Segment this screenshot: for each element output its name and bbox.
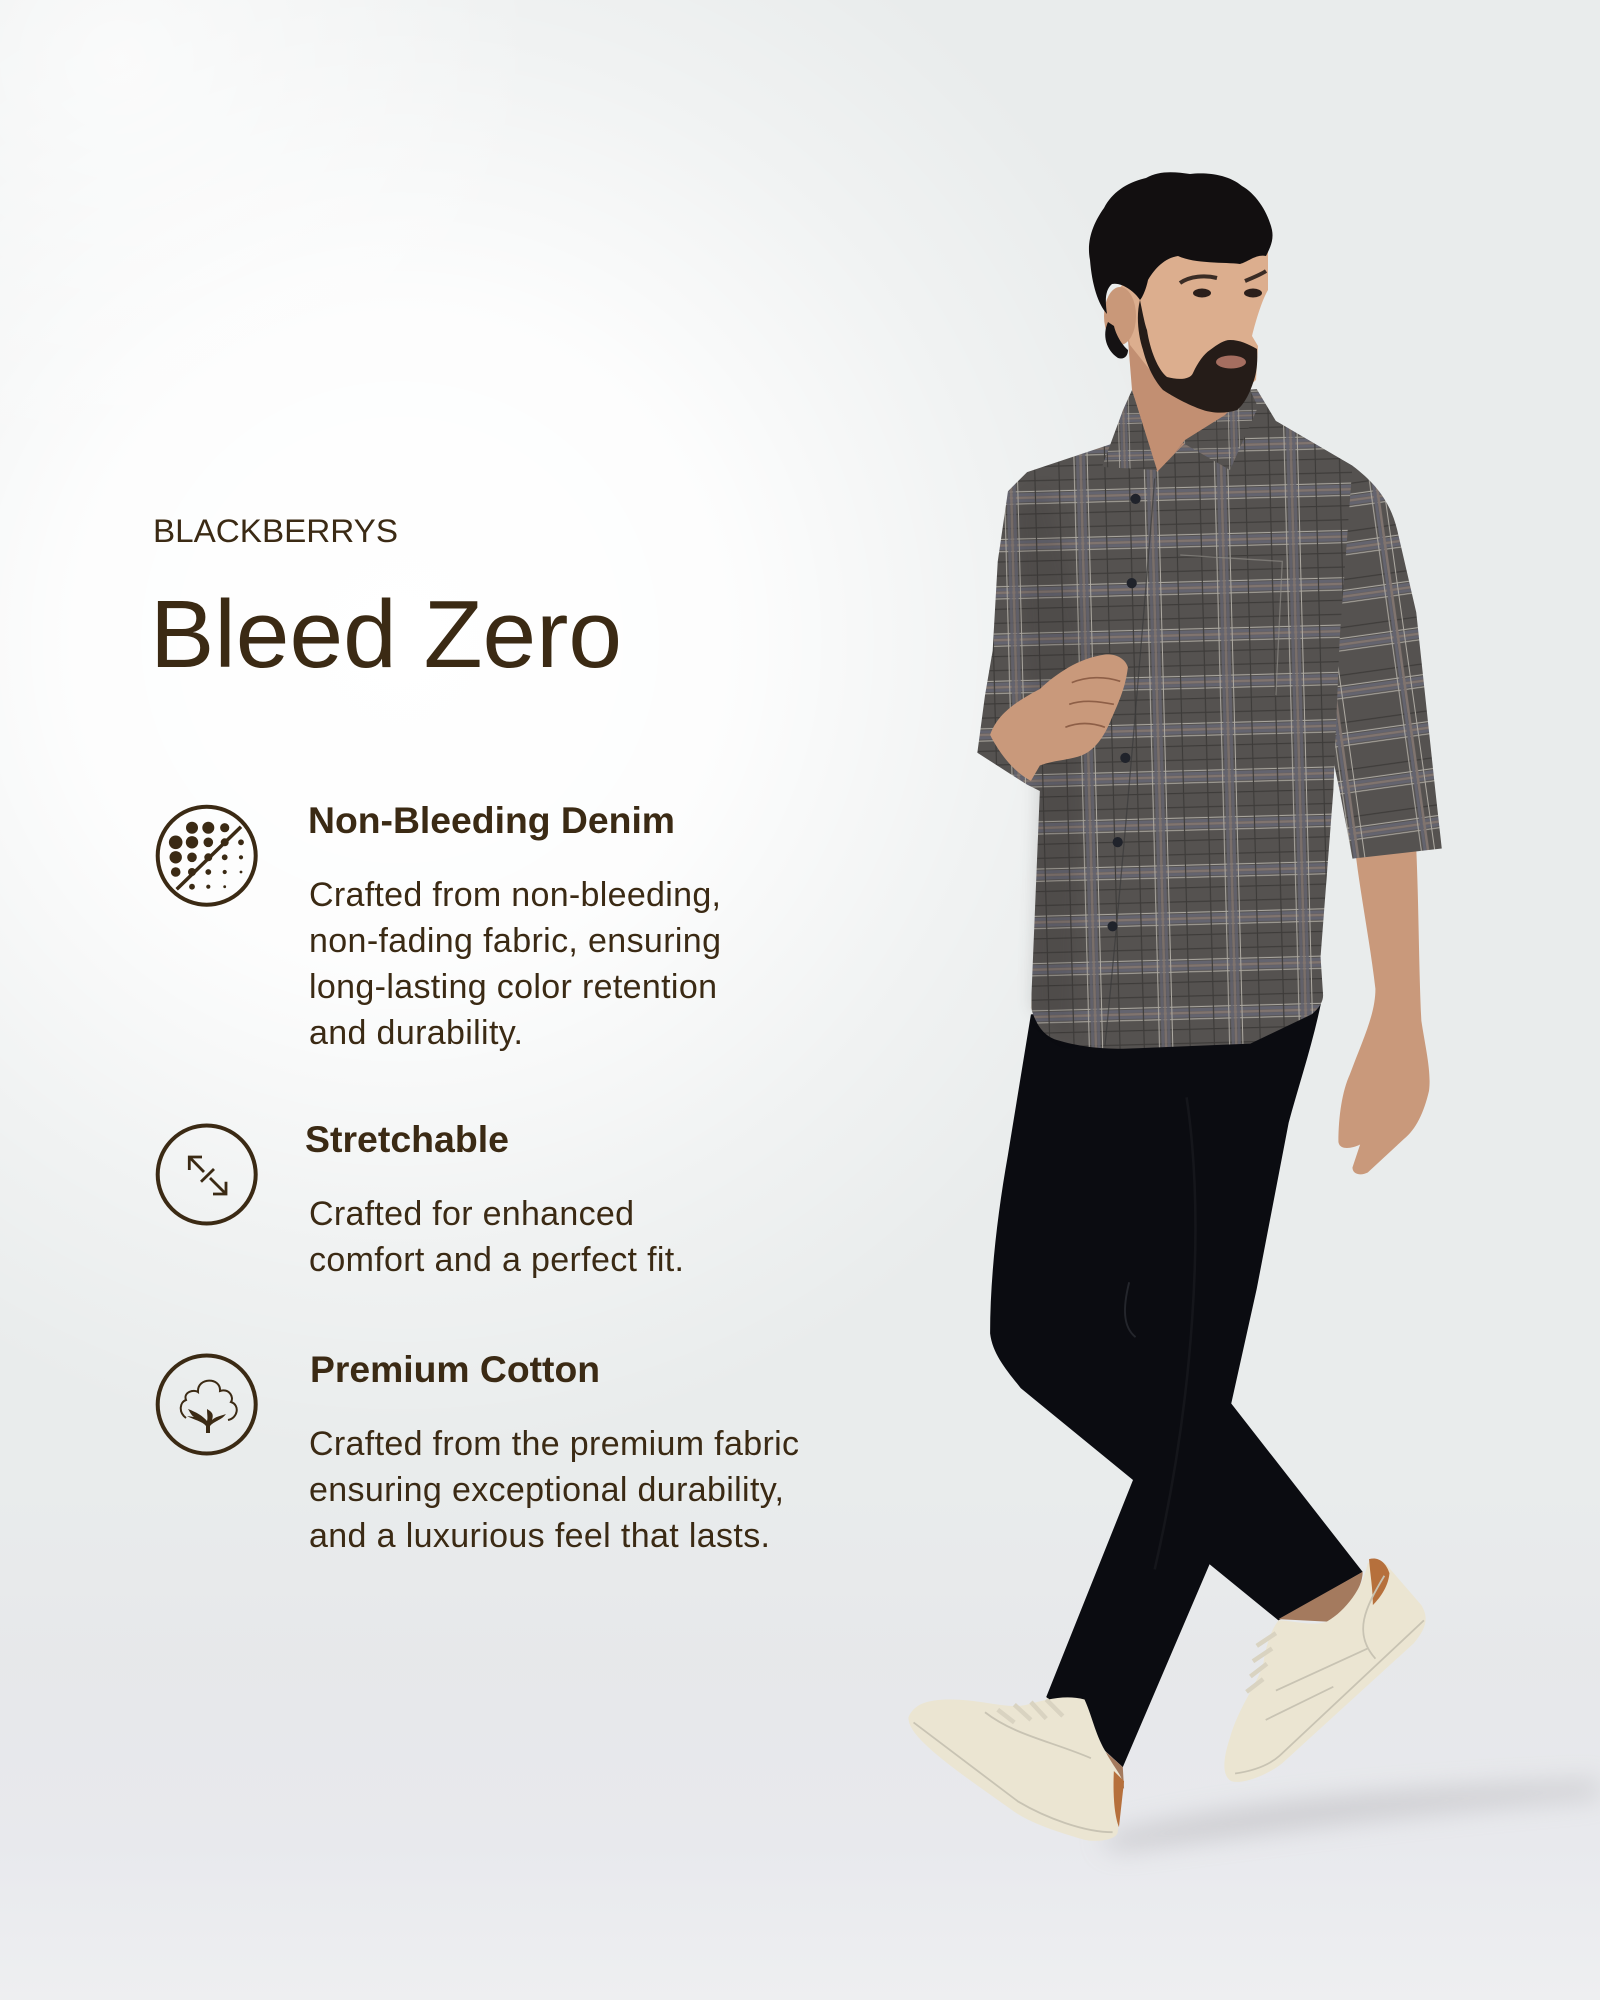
description: long-lasting color retention	[309, 968, 717, 1006]
description	[309, 876, 721, 1052]
description: Crafted from non-bleeding,	[309, 876, 721, 914]
description: and durability.	[309, 1014, 523, 1052]
ankle skin	[1087, 1572, 1363, 1789]
right sleeve	[1276, 421, 1442, 859]
icon: stretch arrows	[158, 1126, 256, 1224]
brand name: BLACKBERRYS	[153, 513, 398, 549]
description: and a luxurious feel that lasts.	[309, 1517, 770, 1555]
left hand	[990, 654, 1128, 781]
right shoe	[1224, 1559, 1426, 1782]
title: Bleed Zero	[150, 581, 622, 688]
ear	[1104, 287, 1136, 345]
lips	[1216, 356, 1246, 368]
face	[1118, 240, 1268, 410]
description	[309, 1195, 684, 1279]
right forearm	[1338, 848, 1430, 1174]
description: Crafted from the premium fabric	[309, 1425, 799, 1463]
neck	[1128, 330, 1245, 472]
shirt body	[977, 389, 1352, 1049]
beard	[1138, 300, 1257, 413]
heading: Premium Cotton	[310, 1349, 600, 1390]
icon: halftone dots	[158, 807, 256, 905]
floor shadow	[1100, 1782, 1600, 1850]
model figure	[908, 172, 1442, 1841]
eyes and brows	[1180, 271, 1266, 298]
heading: Stretchable	[305, 1119, 509, 1160]
description: comfort and a perfect fit.	[309, 1241, 684, 1279]
neck curl	[1105, 322, 1128, 359]
finger lines	[1065, 678, 1120, 727]
feature: stretchable	[158, 1119, 684, 1279]
heading: Non-Bleeding Denim	[308, 800, 675, 841]
description	[309, 1425, 799, 1555]
left shoe	[908, 1697, 1124, 1841]
placket and buttons	[1105, 478, 1282, 1046]
description: non-fading fabric, ensuring	[309, 922, 721, 960]
feature: non-bleeding denim	[158, 800, 721, 1052]
collar	[1102, 390, 1258, 472]
description: ensuring exceptional durability,	[309, 1471, 784, 1509]
feature: premium cotton	[158, 1349, 799, 1555]
hair	[1089, 172, 1273, 314]
shirt shading	[1014, 485, 1085, 1040]
trousers	[990, 993, 1363, 1767]
description: Crafted for enhanced	[309, 1195, 634, 1233]
icon: cotton boll	[158, 1356, 256, 1454]
